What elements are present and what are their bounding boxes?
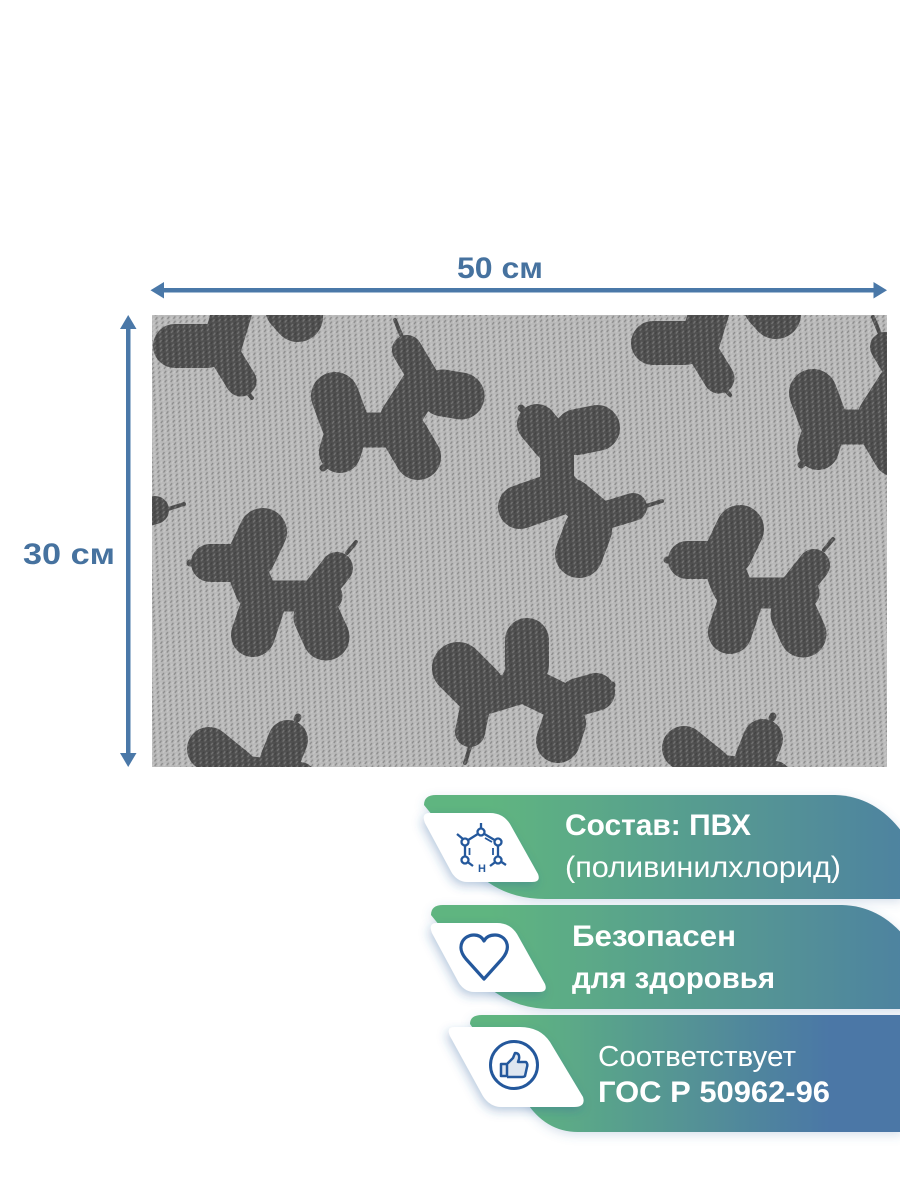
icon: molecule — [457, 823, 506, 866]
balloon dog: lower left — [190, 532, 356, 637]
balloon dog: centre — [520, 408, 662, 554]
white icon card — [449, 1027, 584, 1107]
heading: safe: Безопасен — [572, 920, 736, 953]
width dimension label: 50 см — [457, 252, 543, 285]
arrow: height — [120, 315, 136, 767]
balloon dog: upper right — [801, 317, 900, 465]
subheading: polyvinyl chloride: (поливинилхлорид) — [565, 851, 841, 884]
icon: thumbs up — [490, 1042, 538, 1088]
white icon card — [424, 813, 539, 882]
heading: standard number: ГОС Р 50962-96 — [598, 1076, 830, 1109]
balloon dog: top left repeat — [653, 305, 776, 395]
white icon card — [431, 923, 546, 992]
balloon dog: bottom right — [684, 716, 775, 777]
heading: for health: для здоровья — [572, 962, 775, 995]
balloon dog: bottom left — [209, 717, 300, 778]
molecule letter: Н — [478, 863, 486, 875]
text: complies with: Соответствует — [598, 1041, 796, 1073]
balloon dog: bottom centre — [458, 640, 612, 763]
green banner — [431, 905, 900, 1009]
icon: heart — [461, 935, 507, 979]
fabric base — [152, 315, 887, 767]
arrow: width — [150, 282, 887, 298]
knit texture — [152, 315, 887, 767]
panel: fabric mat with balloon dog pattern — [152, 315, 887, 767]
panel: composition — [424, 795, 900, 899]
heading: composition: Состав: ПВХ — [565, 809, 751, 842]
balloon dog: upper centre left — [323, 320, 461, 468]
green banner — [470, 1015, 900, 1132]
balloon dog: lower right — [667, 529, 833, 634]
panel: health safety — [431, 905, 900, 1009]
green banner — [424, 795, 900, 899]
balloon dog: left edge fragment — [152, 496, 186, 526]
balloon dog: top left — [175, 308, 298, 398]
panel: standard compliance — [449, 1015, 900, 1132]
height dimension label: 30 см — [23, 538, 115, 571]
